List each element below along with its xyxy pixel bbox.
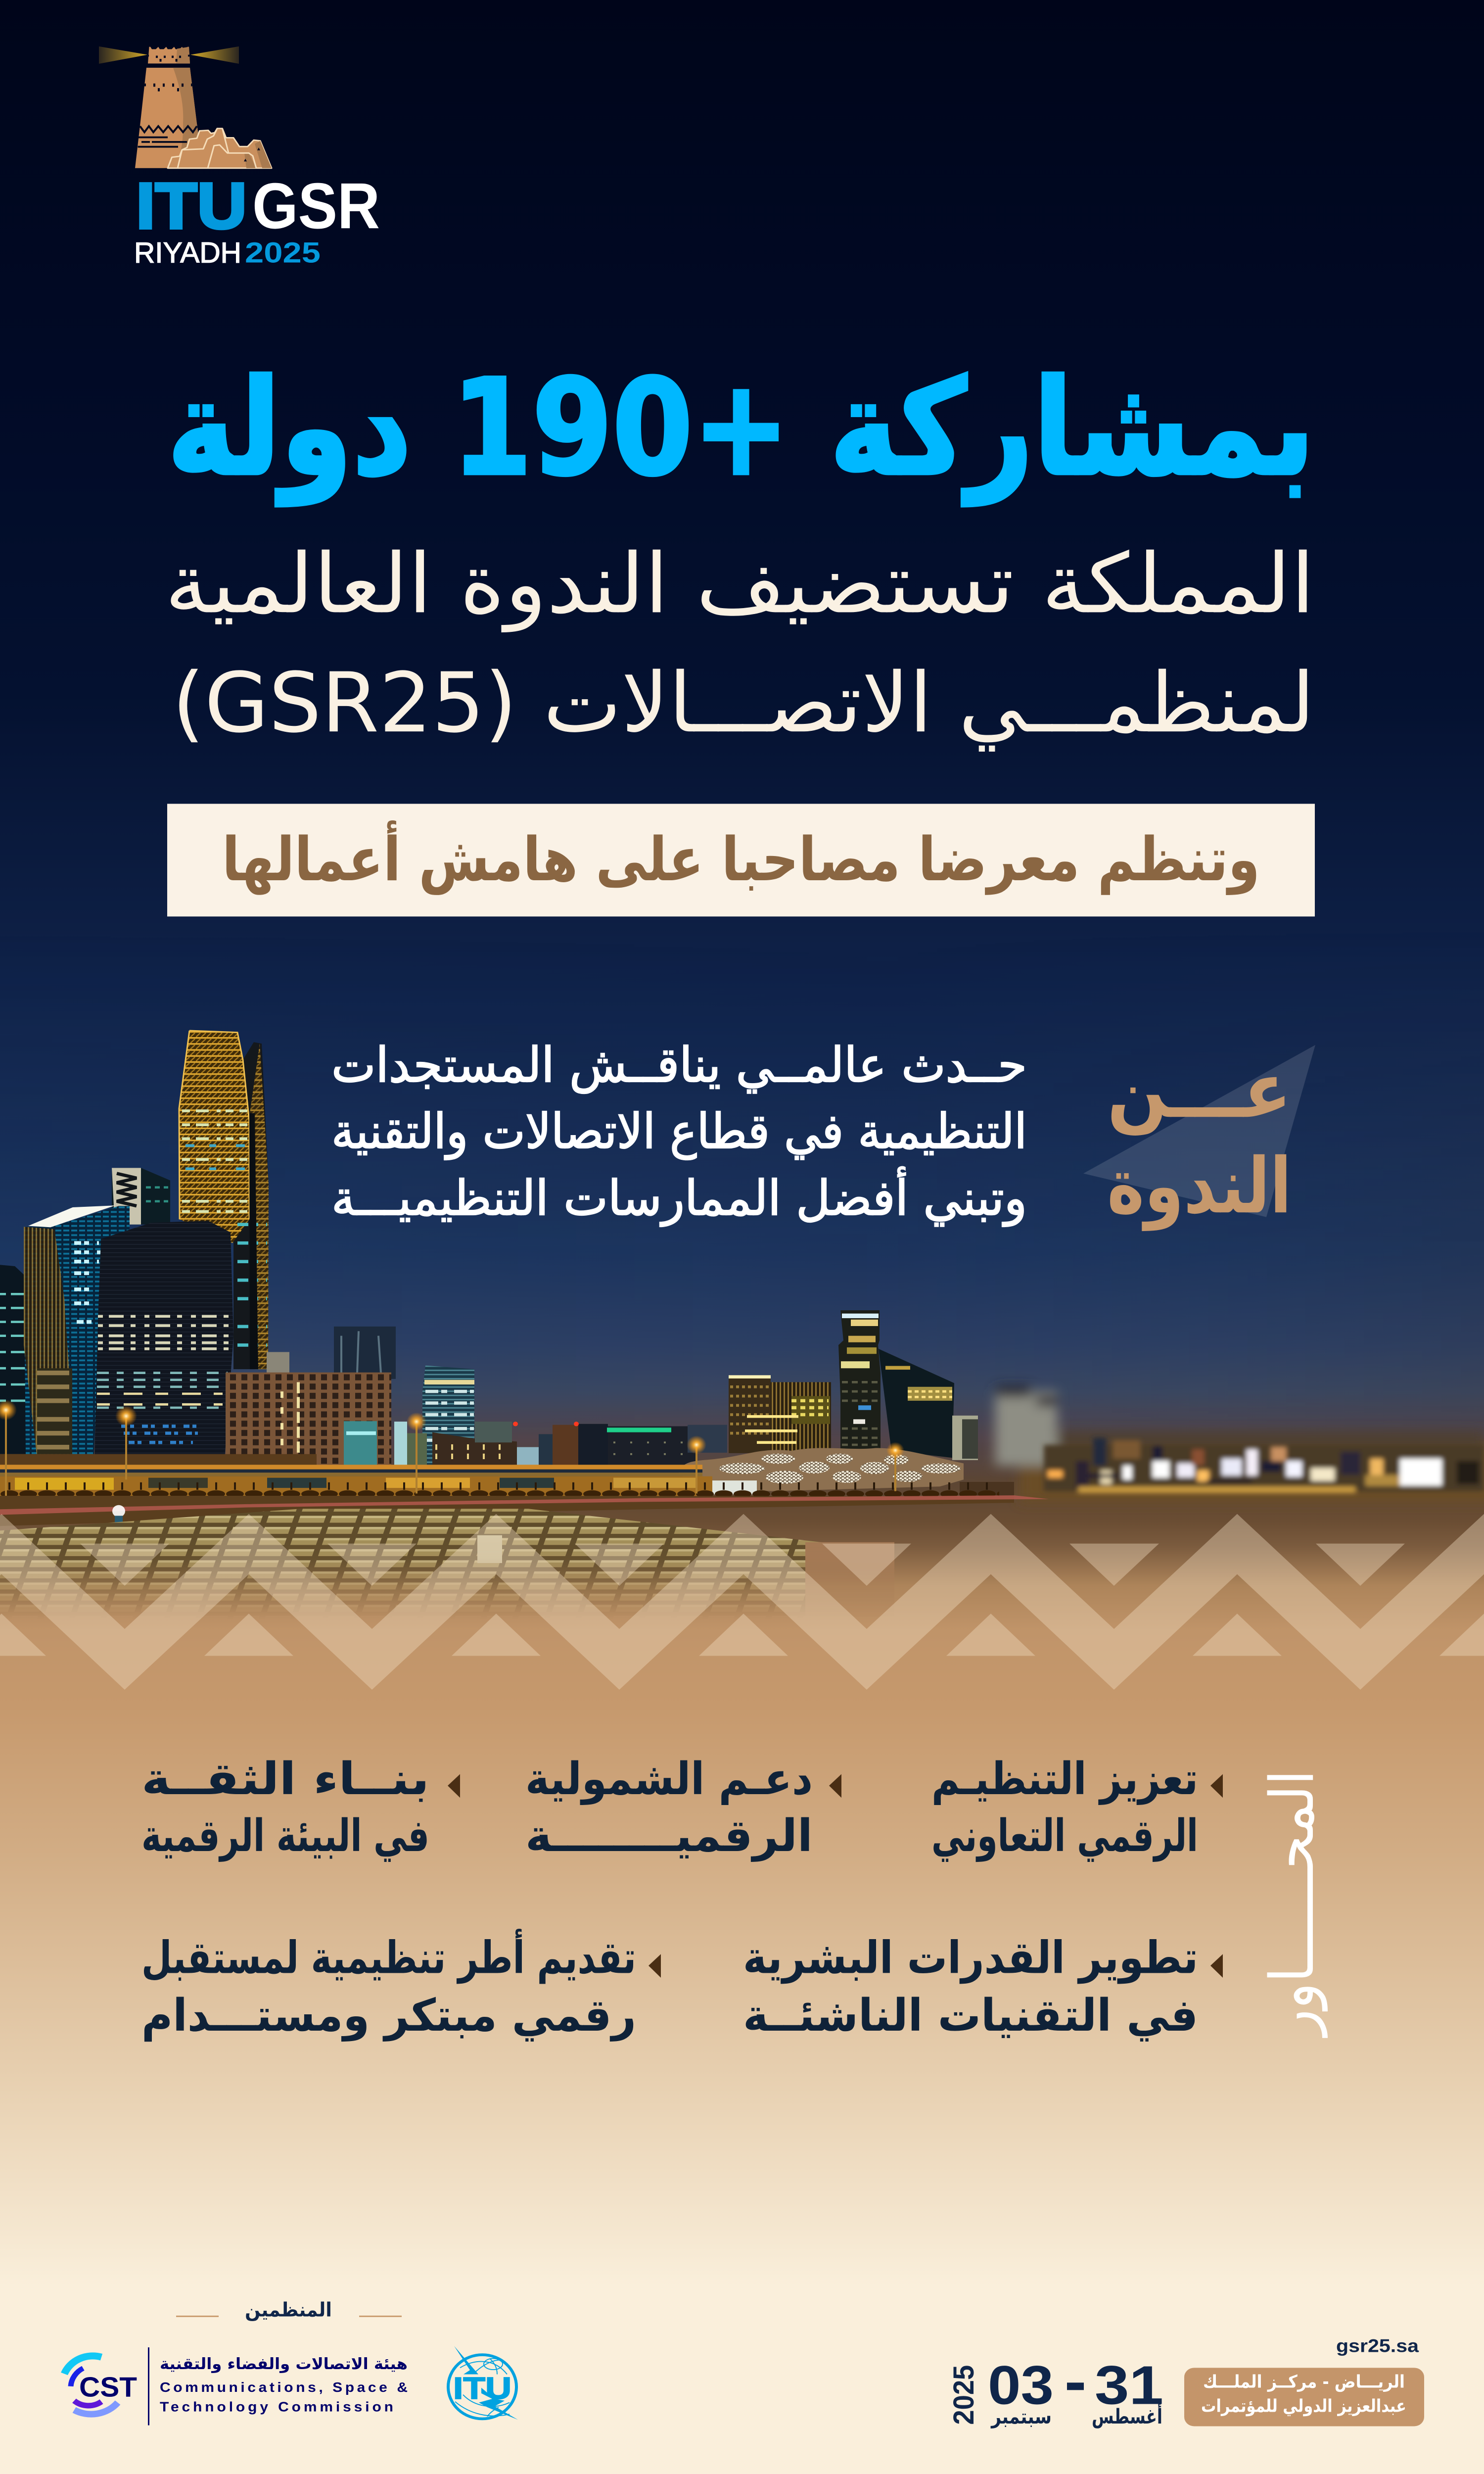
CST name <box>160 2354 408 2415</box>
theme 2 <box>525 1753 841 1862</box>
icon: CST logo <box>64 2356 137 2414</box>
date: 03 September: سبتمبر <box>990 2405 1052 2428</box>
striped back tower <box>112 1168 170 1225</box>
theme 2: دعـم الشمولية <box>525 1753 813 1805</box>
vertical heading: themes: المحــــــاور <box>1257 1770 1328 2038</box>
low brown and dark mid-rise buildings <box>432 1422 727 1467</box>
date: 03 September: 03 <box>988 2355 1054 2416</box>
theme 5 <box>141 1929 661 2042</box>
icon: ITU logo: ITU <box>453 2371 511 2406</box>
logo: ITU GSR Riyadh 2025 <box>99 47 380 269</box>
zigzag pattern <box>0 1514 1484 1690</box>
year vertical: 2025 <box>947 2365 979 2425</box>
date separator <box>1067 2382 1084 2390</box>
left edge tower <box>0 1265 40 1454</box>
striped teal tower <box>394 1366 474 1467</box>
theme 4 <box>743 1932 1223 2042</box>
organisers heading: المنظمين <box>245 2298 332 2321</box>
CST name: Technology Commission <box>160 2399 393 2415</box>
theme 1: تعزيز التنظيـم <box>931 1753 1198 1805</box>
subheading line 2: لمنظمـــي الاتصـــالات (GSR25) <box>172 655 1315 752</box>
headline: 190+ countries: بمشاركة +190 دولة <box>167 351 1315 507</box>
about text block: حــدث عالمــي يناقــش المستجدات <box>331 1037 1027 1094</box>
theme 1: الرقمي التعاوني <box>931 1810 1198 1862</box>
date: 31 August: 31 <box>1095 2355 1163 2416</box>
banner: exhibition <box>167 804 1315 916</box>
heading: about line 1: عـــن <box>1107 1046 1292 1136</box>
brown hotel block <box>226 1327 396 1467</box>
theme 3: بنــاء الثقــة <box>141 1753 429 1805</box>
banner: exhibition: وتنظم معرضا مصاحبا على هامش أعمالها <box>222 820 1260 895</box>
about text block <box>331 1037 1027 1227</box>
plaza canopy panels <box>0 1509 894 1611</box>
dark central tower <box>94 1221 233 1467</box>
logo wordmark 2025: 2025 <box>245 237 321 269</box>
theme 3 <box>141 1753 460 1862</box>
street lights <box>0 1400 904 1498</box>
icon: CST logo: CST <box>79 2372 137 2403</box>
logo wordmark RIYADH: RIYADH <box>134 237 241 269</box>
theme 4: تطوير القدرات البشرية <box>743 1932 1198 1984</box>
tall twisted tower and sloped dark tower <box>838 1310 978 1460</box>
theme 2: الرقميــــــــة <box>525 1810 813 1862</box>
theme 1 <box>931 1753 1223 1862</box>
metro station <box>679 1448 964 1494</box>
CST name: Communications, Space & <box>160 2380 408 2395</box>
road with light trails <box>0 1495 1049 1528</box>
theme 5: تقديم أطر تنظيمية لمستقبل <box>141 1929 636 1984</box>
panel: about the symposium <box>331 1037 1315 1231</box>
highway and palms <box>0 1454 1014 1500</box>
subheading line 1: المملكة تستضيف الندوة العالمية <box>165 536 1315 633</box>
theme 3: في البيئة الرقمية <box>141 1810 429 1862</box>
footer: organisers <box>64 2298 518 2426</box>
theme 4: في التقنيات الناشئــة <box>743 1990 1198 2042</box>
date: 31 August: أغسطس <box>1092 2403 1162 2428</box>
blue glass tower <box>24 1205 130 1454</box>
golden mid towers <box>729 1375 831 1453</box>
right blurred distant city <box>995 1386 1484 1503</box>
about text block: وتبني أفضل الممارسات التنظيميـــة <box>331 1166 1027 1227</box>
website: gsr25.sa <box>1336 2336 1419 2356</box>
CST name: هيئة الاتصالات والفضاء والتقنية <box>160 2354 408 2374</box>
heading: about line 2: الندوة <box>1107 1142 1292 1231</box>
logo wordmark GSR: GSR <box>252 169 380 242</box>
about text block: التنظيمية في قطاع الاتصالات والتقنية <box>331 1103 1027 1160</box>
venue box: عبدالعزيز الدولي للمؤتمرات <box>1201 2396 1406 2416</box>
venue box: الريـــاض - مركــز الملـــك <box>1203 2372 1405 2392</box>
venue box <box>1184 2368 1424 2426</box>
tall golden tower <box>179 1031 269 1369</box>
photo: Riyadh KAFD skyline at night <box>0 1031 1484 1633</box>
theme 5: رقمي مبتكر ومستـــدام <box>141 1990 636 2042</box>
decorative triangle behind heading <box>1083 1045 1315 1217</box>
icon: ITU logo <box>448 2346 518 2420</box>
footer: date and venue <box>947 2336 1424 2428</box>
logo wordmark ITU: ITU <box>136 169 247 242</box>
icon: lighthouse tower with rocks <box>99 47 272 168</box>
panel: themes <box>141 1753 1328 2042</box>
